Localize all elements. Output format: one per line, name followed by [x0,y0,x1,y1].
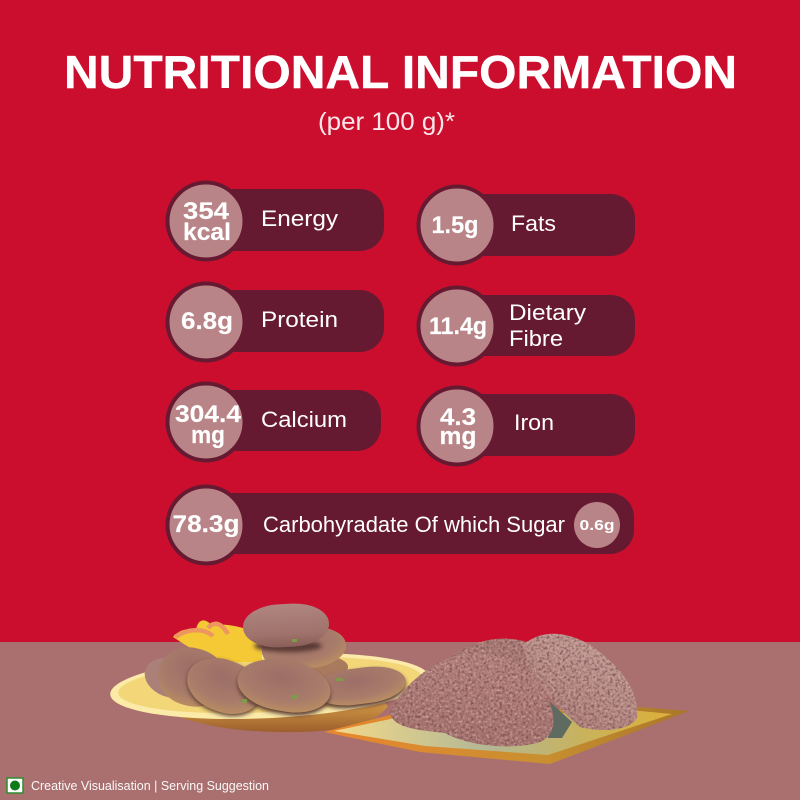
panel: energy: Energy [261,206,338,231]
panel: protein: Protein [261,307,338,332]
panel: iron [418,388,635,464]
panel: fats [418,186,635,264]
subtitle: (per 100 g)* [318,108,455,136]
panel: iron: Iron [514,410,554,435]
tray rim [324,707,689,764]
panel: iron: mg [440,423,476,450]
panel: protein: 6.8g [181,308,233,335]
icon: vegetarian mark [7,778,23,793]
food: plate of patties [109,602,431,732]
carrot garnish [173,620,262,662]
panel: carbohydrate: 78.3g [172,511,240,538]
sugar value badge: 0.6g [580,517,614,534]
background: muted table area [0,642,800,800]
food: tray of idli [324,634,689,764]
panel: energy: kcal [183,219,231,246]
disclaimer text: Creative Visualisation | Serving Suggestion [31,779,269,793]
panel: carbohydrate: Carbohyradate Of which Sugar [263,512,565,537]
plate surface [117,650,423,720]
plate base [163,698,388,732]
sugar value badge [574,502,620,548]
panel: energy [168,182,384,260]
tray surface [334,711,672,755]
panel: dietary fibre: 11.4g [429,313,487,340]
panel: carbohydrate [168,486,634,564]
panel: dietary fibre: Dietary [509,300,586,325]
idli back [445,639,535,680]
panel: calcium: 304.4 [175,401,242,428]
panel: calcium [168,384,381,460]
idli front [390,653,553,746]
plate rim [109,646,431,726]
idli right [523,634,637,730]
patties stack [276,655,348,679]
panel: protein [168,284,384,360]
panel: fats: Fats [511,211,556,236]
panel: fats: 1.5g [432,212,478,239]
panel: dietary fibre [418,288,635,364]
title: NUTRITIONAL INFORMATION [64,46,737,98]
panel: energy: 354 [183,198,230,225]
panel: dietary fibre: Fibre [509,326,563,351]
panel: iron: 4.3 [440,404,476,431]
panel: calcium: mg [191,422,225,449]
green specks [242,639,343,703]
panel: calcium: Calcium [261,407,347,432]
idli shadow [548,700,572,738]
